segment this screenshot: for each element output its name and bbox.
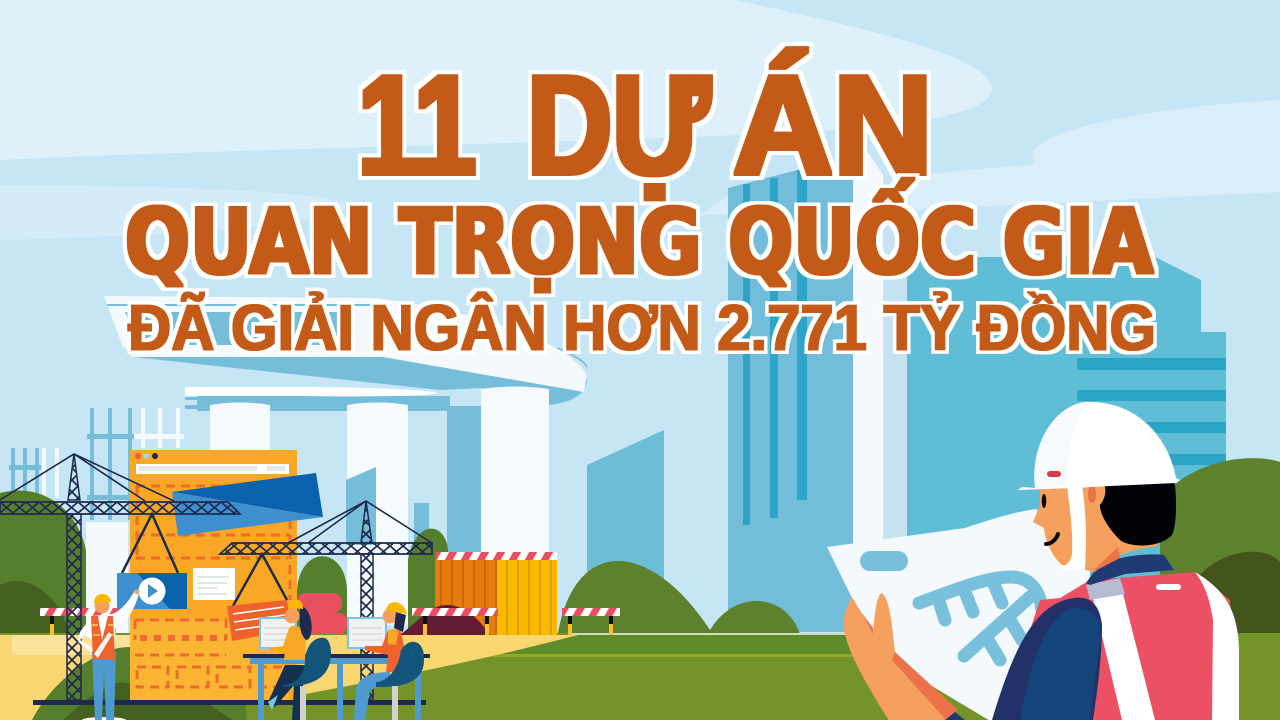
- crane base: [33, 700, 426, 705]
- plan sheet: [827, 509, 1090, 720]
- sleeve: [992, 598, 1102, 720]
- title line 1: DỰ: [527, 46, 710, 205]
- chair: [376, 642, 424, 687]
- worker man: [354, 602, 424, 720]
- worker pointing: [78, 590, 140, 720]
- plan label: [860, 551, 908, 571]
- hills behind site: [0, 491, 800, 640]
- engineer reading a plan: [827, 402, 1240, 720]
- containers: [435, 552, 557, 635]
- sand path: [0, 635, 578, 720]
- document card: [193, 568, 235, 600]
- bridge deck: [104, 296, 587, 392]
- flyover bridge: [104, 296, 587, 640]
- chin strap: [1060, 485, 1086, 571]
- red pipes: [297, 593, 348, 634]
- ear: [1085, 478, 1105, 505]
- helmet: [1018, 402, 1180, 490]
- bridge underside: [133, 357, 587, 640]
- barrier right: [562, 608, 620, 635]
- dashed content: [135, 486, 290, 687]
- title line 1: 11: [358, 46, 476, 205]
- barrier middle: [412, 608, 498, 635]
- mouth: [1046, 534, 1058, 544]
- hand: [843, 593, 965, 720]
- mid-left building: [587, 430, 664, 630]
- pier 1: [210, 402, 270, 460]
- cloud: left: [0, 185, 345, 240]
- title line 1: [358, 46, 933, 205]
- barriers: [40, 608, 620, 635]
- pier 2: [346, 402, 408, 625]
- monitor 2: [348, 618, 386, 648]
- cloud: right: [700, 100, 1280, 215]
- crane 2: [220, 501, 432, 700]
- worker woman: [268, 600, 331, 720]
- title line 3: ĐÃ GIẢI NGÂN HƠN 2.771 TỶ ĐỒNG: [128, 291, 1156, 364]
- pier 3: [481, 386, 549, 560]
- shirt cuff: [945, 712, 965, 720]
- right hill: [1160, 458, 1280, 660]
- desk: [243, 654, 430, 720]
- icon: play: [138, 578, 166, 604]
- video card: [117, 573, 187, 609]
- orange app window: [130, 450, 297, 700]
- title: [125, 46, 1156, 364]
- dirt pile: [400, 605, 490, 635]
- cloud: upper left: [0, 0, 992, 160]
- central tower: [728, 130, 907, 632]
- lower deck: [197, 396, 450, 411]
- blue ribbon: [172, 473, 323, 536]
- face: [1033, 486, 1100, 568]
- monitor 1: [260, 618, 296, 648]
- chair: [283, 638, 331, 687]
- orange sign: [227, 600, 291, 641]
- hair: [1100, 479, 1176, 545]
- ground: [0, 633, 1280, 720]
- scaffolding: [9, 408, 184, 520]
- neck: [1085, 480, 1158, 572]
- back vest: [1000, 572, 1240, 720]
- collar: [1086, 554, 1174, 585]
- barrier left: [40, 608, 122, 635]
- plan drawing: [919, 577, 1042, 660]
- right building: [907, 257, 1226, 640]
- crane 1: [0, 454, 240, 700]
- eye: [1042, 494, 1046, 508]
- title line 1: ÁN: [733, 46, 933, 205]
- grass mound: [32, 647, 247, 720]
